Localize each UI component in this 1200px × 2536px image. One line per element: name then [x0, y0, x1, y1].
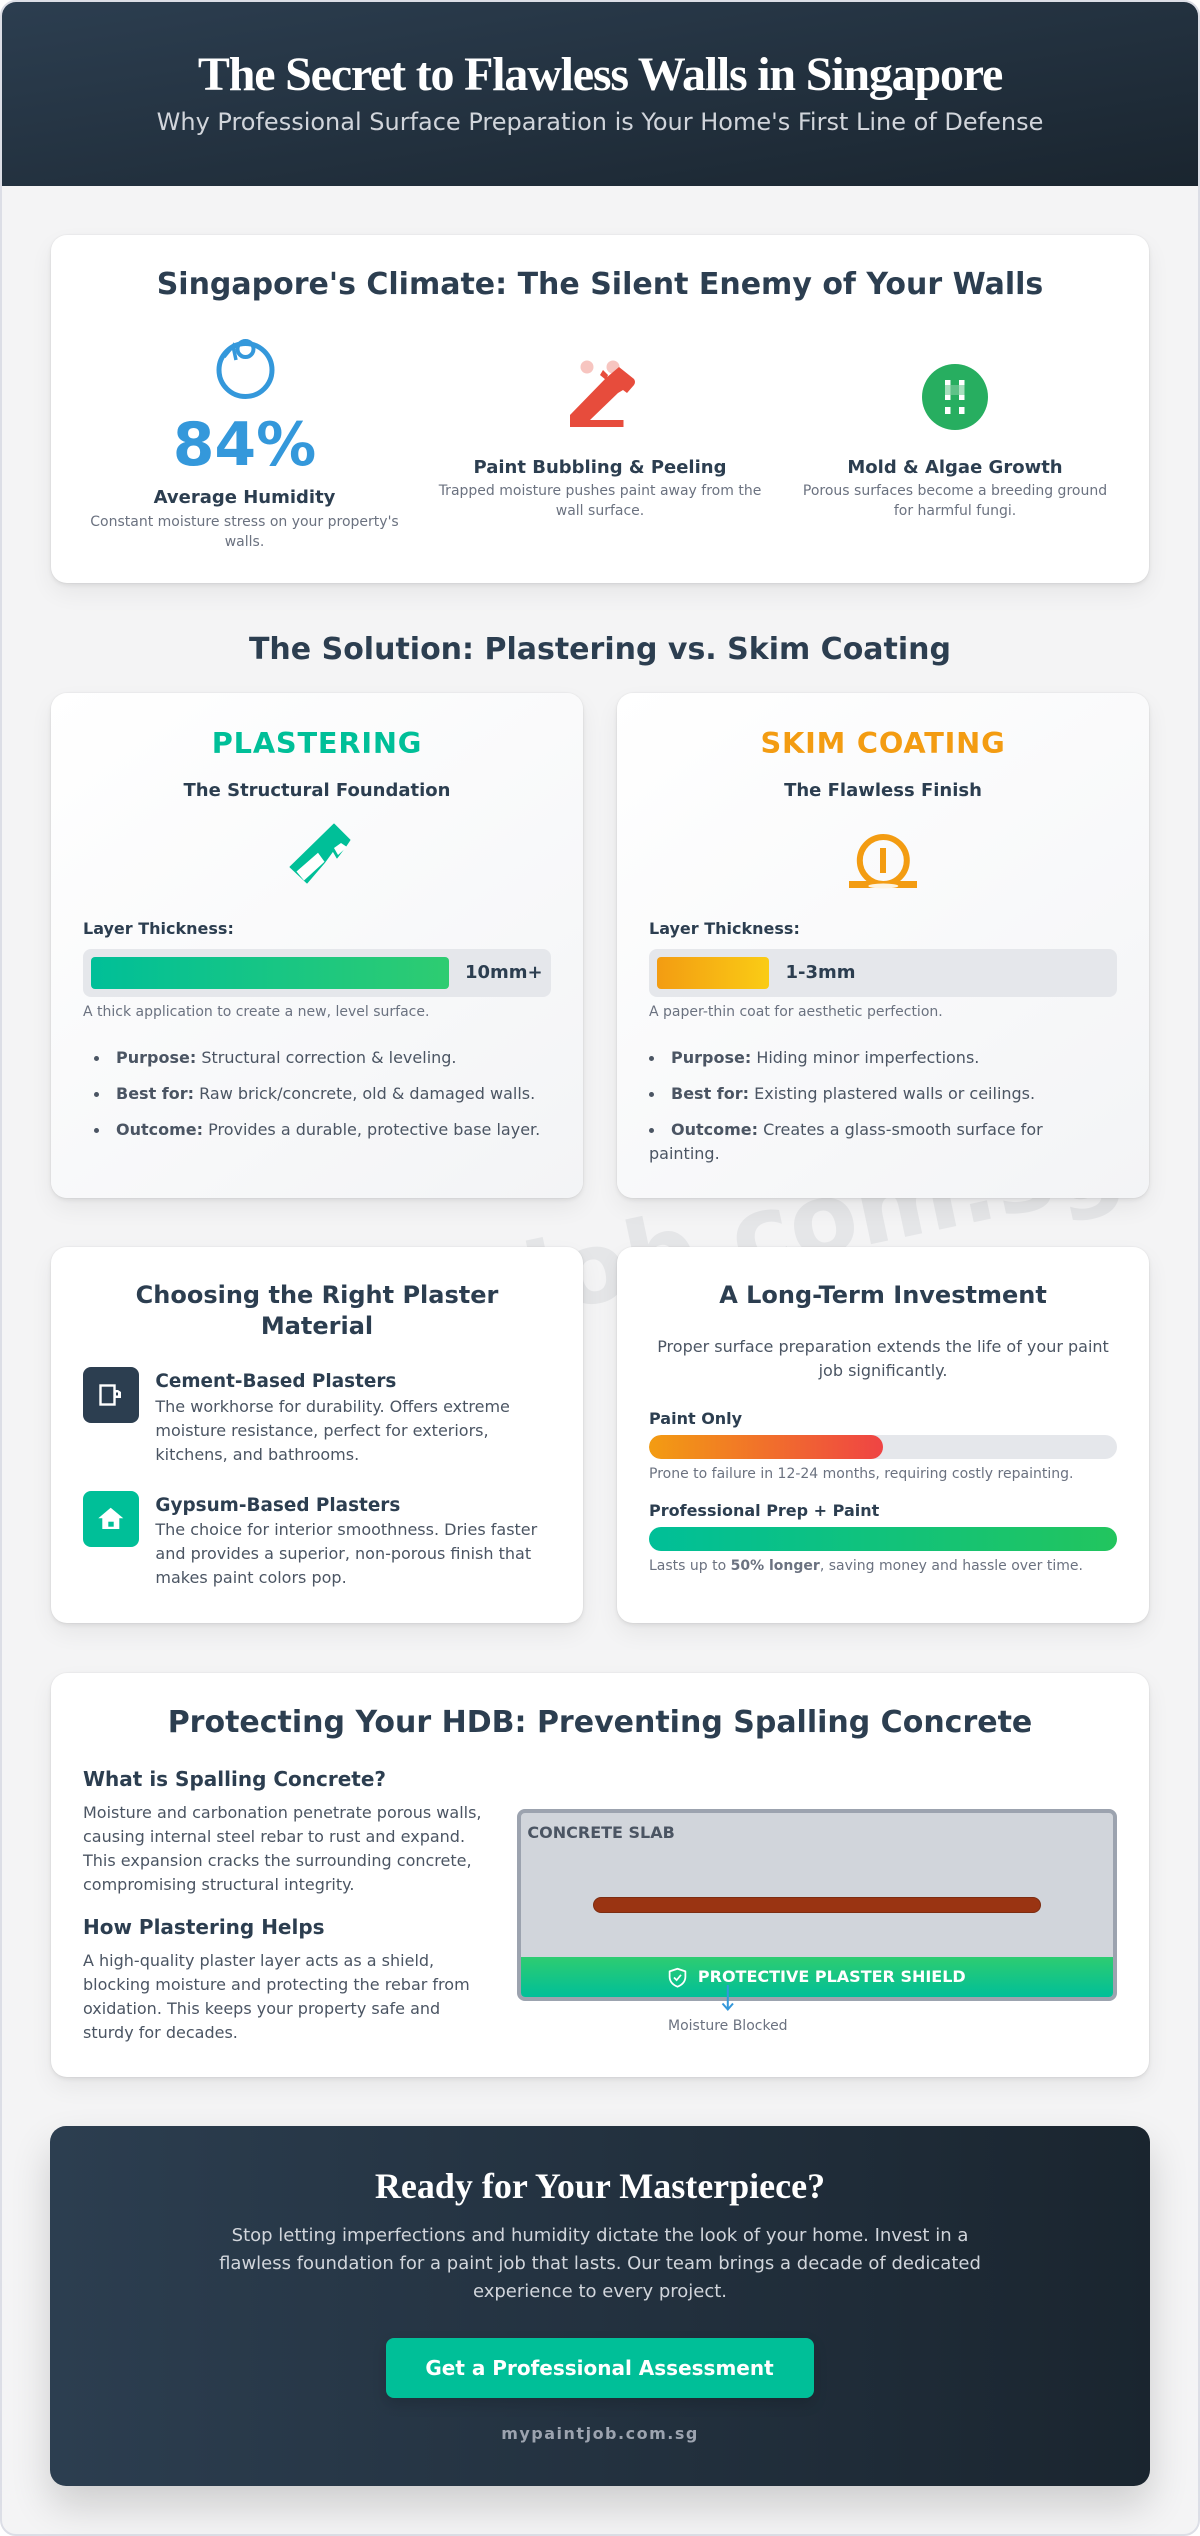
- description: and provides a superior, non-porous finish that: [155, 1544, 531, 1563]
- stat: average humidity: [90, 339, 399, 550]
- title: The Secret to Flawless Walls in Singapore: [198, 48, 1002, 101]
- icon: cement bag: [83, 1367, 139, 1423]
- panel: plaster material: [51, 1247, 583, 1623]
- text: flawless foundation for a paint job that lasts. Our team brings a decade of dedicated: [219, 2253, 981, 2274]
- text: how plastering helps: sturdy for decades.: [83, 2023, 238, 2042]
- text: what is spalling: Moisture and carbonation penetrate porous walls,: [83, 1803, 482, 1822]
- name: Gypsum-Based Plasters: [155, 1494, 400, 1516]
- description: Constant moisture stress on your property's: [90, 514, 399, 530]
- intro text: Proper surface preparation extends the life of your paint: [657, 1337, 1109, 1356]
- number: 84%: 84%: [173, 410, 316, 480]
- note: Lasts up to 50% longer, saving money and hassle over time.: [649, 1558, 1083, 1574]
- list of properties: [649, 1048, 1043, 1163]
- bar: professional prep: [649, 1527, 1117, 1551]
- bar: thickness 1-3mm: [649, 949, 1117, 997]
- heading: Ready for Your Masterpiece?: [375, 2166, 825, 2206]
- rebar: [593, 1897, 1041, 1913]
- subheading: how plastering helps: How Plastering Helps: [83, 1915, 325, 1939]
- description: [438, 483, 761, 519]
- icon: house: [83, 1491, 139, 1547]
- panel: long-term investment: [617, 1247, 1149, 1623]
- subheading: The Structural Foundation: [184, 780, 450, 801]
- label: Paint Bubbling & Peeling: [474, 457, 726, 478]
- note: A thick application to create a new, level surface.: [83, 1004, 429, 1020]
- heading: Material: [261, 1312, 373, 1340]
- subtitle: Why Professional Surface Preparation is Your Home's First Line of Defense: [157, 108, 1043, 136]
- material: gypsum: [83, 1491, 538, 1587]
- text: how plastering helps: oxidation. This keeps your property safe and: [83, 1999, 440, 2018]
- risk: paint bubbling: [438, 360, 761, 519]
- description: Trapped moisture pushes paint away from the: [439, 483, 761, 499]
- button: [386, 2338, 814, 2398]
- text: how plastering helps: [83, 1951, 470, 2042]
- label: professional prep: Professional Prep + Paint: [649, 1501, 879, 1520]
- item: purpose: Purpose: Hiding minor imperfections.: [671, 1048, 979, 1066]
- description: for harmful fungi.: [894, 503, 1016, 519]
- icon: trowel: [290, 824, 350, 884]
- bar: thickness 10mm+: [83, 949, 551, 997]
- heading: the solution: The Solution: Plastering vs. Skim Coating: [249, 632, 951, 667]
- description: walls.: [225, 534, 264, 550]
- heading: A Long-Term Investment: [719, 1281, 1047, 1309]
- panel: skim coating: [617, 693, 1149, 1198]
- item: outcome: [649, 1120, 1043, 1163]
- bar fill: [657, 957, 769, 989]
- note: Prone to failure in 12-24 months, requiring costly repainting.: [649, 1466, 1073, 1482]
- description: kitchens, and bathrooms.: [155, 1445, 359, 1464]
- item: best for: Best for: Raw brick/concrete, old & damaged walls.: [116, 1084, 535, 1103]
- text: Stop letting imperfections and humidity dictate the look of your home. Invest in a: [232, 2225, 968, 2246]
- description: [155, 1520, 538, 1587]
- item: outcome: painting.: [649, 1144, 720, 1163]
- label: layer thickness: Layer Thickness:: [83, 919, 234, 938]
- panel: plastering: [51, 693, 583, 1198]
- material: cement: [83, 1367, 510, 1464]
- bar fill: [91, 957, 449, 989]
- description: The choice for interior smoothness. Dries faster: [155, 1520, 537, 1539]
- heading: SKIM COATING: [760, 726, 1006, 760]
- label: Mold & Algae Growth: [847, 457, 1063, 478]
- text: what is spalling: causing internal steel rebar to rust and expand.: [83, 1827, 465, 1846]
- bar: paint only: [649, 1435, 1117, 1459]
- text: what is spalling: [82, 1803, 482, 1894]
- intro text: [657, 1337, 1109, 1380]
- button: Get a Professional Assessment: [425, 2356, 774, 2380]
- heading: PLASTERING: [212, 726, 422, 760]
- label: moisture blocked: Moisture Blocked: [668, 2018, 788, 2034]
- label: Average Humidity: [154, 487, 335, 508]
- risk: mold: [803, 364, 1107, 519]
- note: A paper-thin coat for aesthetic perfection.: [649, 1004, 943, 1020]
- panel: climate: [51, 235, 1149, 583]
- diagram: concrete slab: [516, 1809, 1117, 2001]
- bar fill: [649, 1435, 883, 1459]
- description: [90, 514, 399, 550]
- icon: skim roller: [849, 834, 917, 888]
- description: [155, 1397, 510, 1464]
- item: outcome: Outcome: Provides a durable, protective base layer.: [116, 1120, 540, 1139]
- text: what is spalling: This expansion cracks the surrounding concrete,: [83, 1851, 472, 1870]
- description: The workhorse for durability. Offers extreme: [155, 1397, 510, 1416]
- description: moisture resistance, perfect for exteriors,: [155, 1421, 489, 1440]
- description: wall surface.: [556, 503, 644, 519]
- icon: shield: [668, 1968, 686, 1988]
- heading: Protecting Your HDB: Preventing Spalling Concrete: [168, 1705, 1032, 1740]
- call to action: [50, 2126, 1150, 2486]
- icon: water drop: [216, 339, 274, 399]
- label: layer thickness: Layer Thickness:: [649, 919, 800, 938]
- label: paint only: Paint Only: [649, 1409, 742, 1428]
- item: outcome: Outcome: Creates a glass-smooth surface for: [671, 1120, 1043, 1139]
- icon: peeling paint: [570, 360, 635, 427]
- plaster shield layer: [520, 1957, 1114, 1997]
- intro text: job significantly.: [819, 1361, 947, 1380]
- heading: Choosing the Right Plaster: [136, 1281, 498, 1309]
- text: how plastering helps: A high-quality plaster layer acts as a shield,: [83, 1951, 434, 1970]
- subheading: The Flawless Finish: [784, 780, 982, 801]
- label: shield: PROTECTIVE PLASTER SHIELD: [698, 1967, 966, 1986]
- heading: climate: Singapore's Climate: The Silent Enemy of Your Walls: [157, 267, 1043, 302]
- value: 10mm+: [465, 962, 543, 983]
- text: experience to every project.: [473, 2281, 727, 2302]
- header: [2, 2, 1198, 186]
- value: 1-3mm: [786, 962, 856, 983]
- list of properties: [94, 1048, 540, 1139]
- heading: [136, 1281, 498, 1340]
- panel: spalling concrete: [51, 1673, 1149, 2077]
- text: [219, 2225, 981, 2302]
- description: makes paint colors pop.: [155, 1568, 347, 1587]
- item: best for: Best for: Existing plastered walls or ceilings.: [671, 1084, 1035, 1103]
- text: how plastering helps: blocking moisture and protecting the rebar from: [83, 1975, 470, 1994]
- text: what is spalling: compromising structural integrity.: [83, 1875, 354, 1894]
- description: Porous surfaces become a breeding ground: [803, 483, 1107, 499]
- arrow: moisture: [722, 1985, 734, 2011]
- item: purpose: Purpose: Structural correction & leveling.: [116, 1048, 457, 1066]
- label: concrete slab: CONCRETE SLAB: [527, 1823, 675, 1842]
- name: Cement-Based Plasters: [155, 1371, 396, 1392]
- description: [803, 483, 1107, 519]
- website: mypaintjob.com.sg: [501, 2424, 699, 2443]
- icon: mold warning: [922, 364, 988, 430]
- watermark: mypaintjob.com.sg: [67, 1101, 1133, 1434]
- subheading: what is spalling: What is Spalling Concrete?: [83, 1767, 386, 1791]
